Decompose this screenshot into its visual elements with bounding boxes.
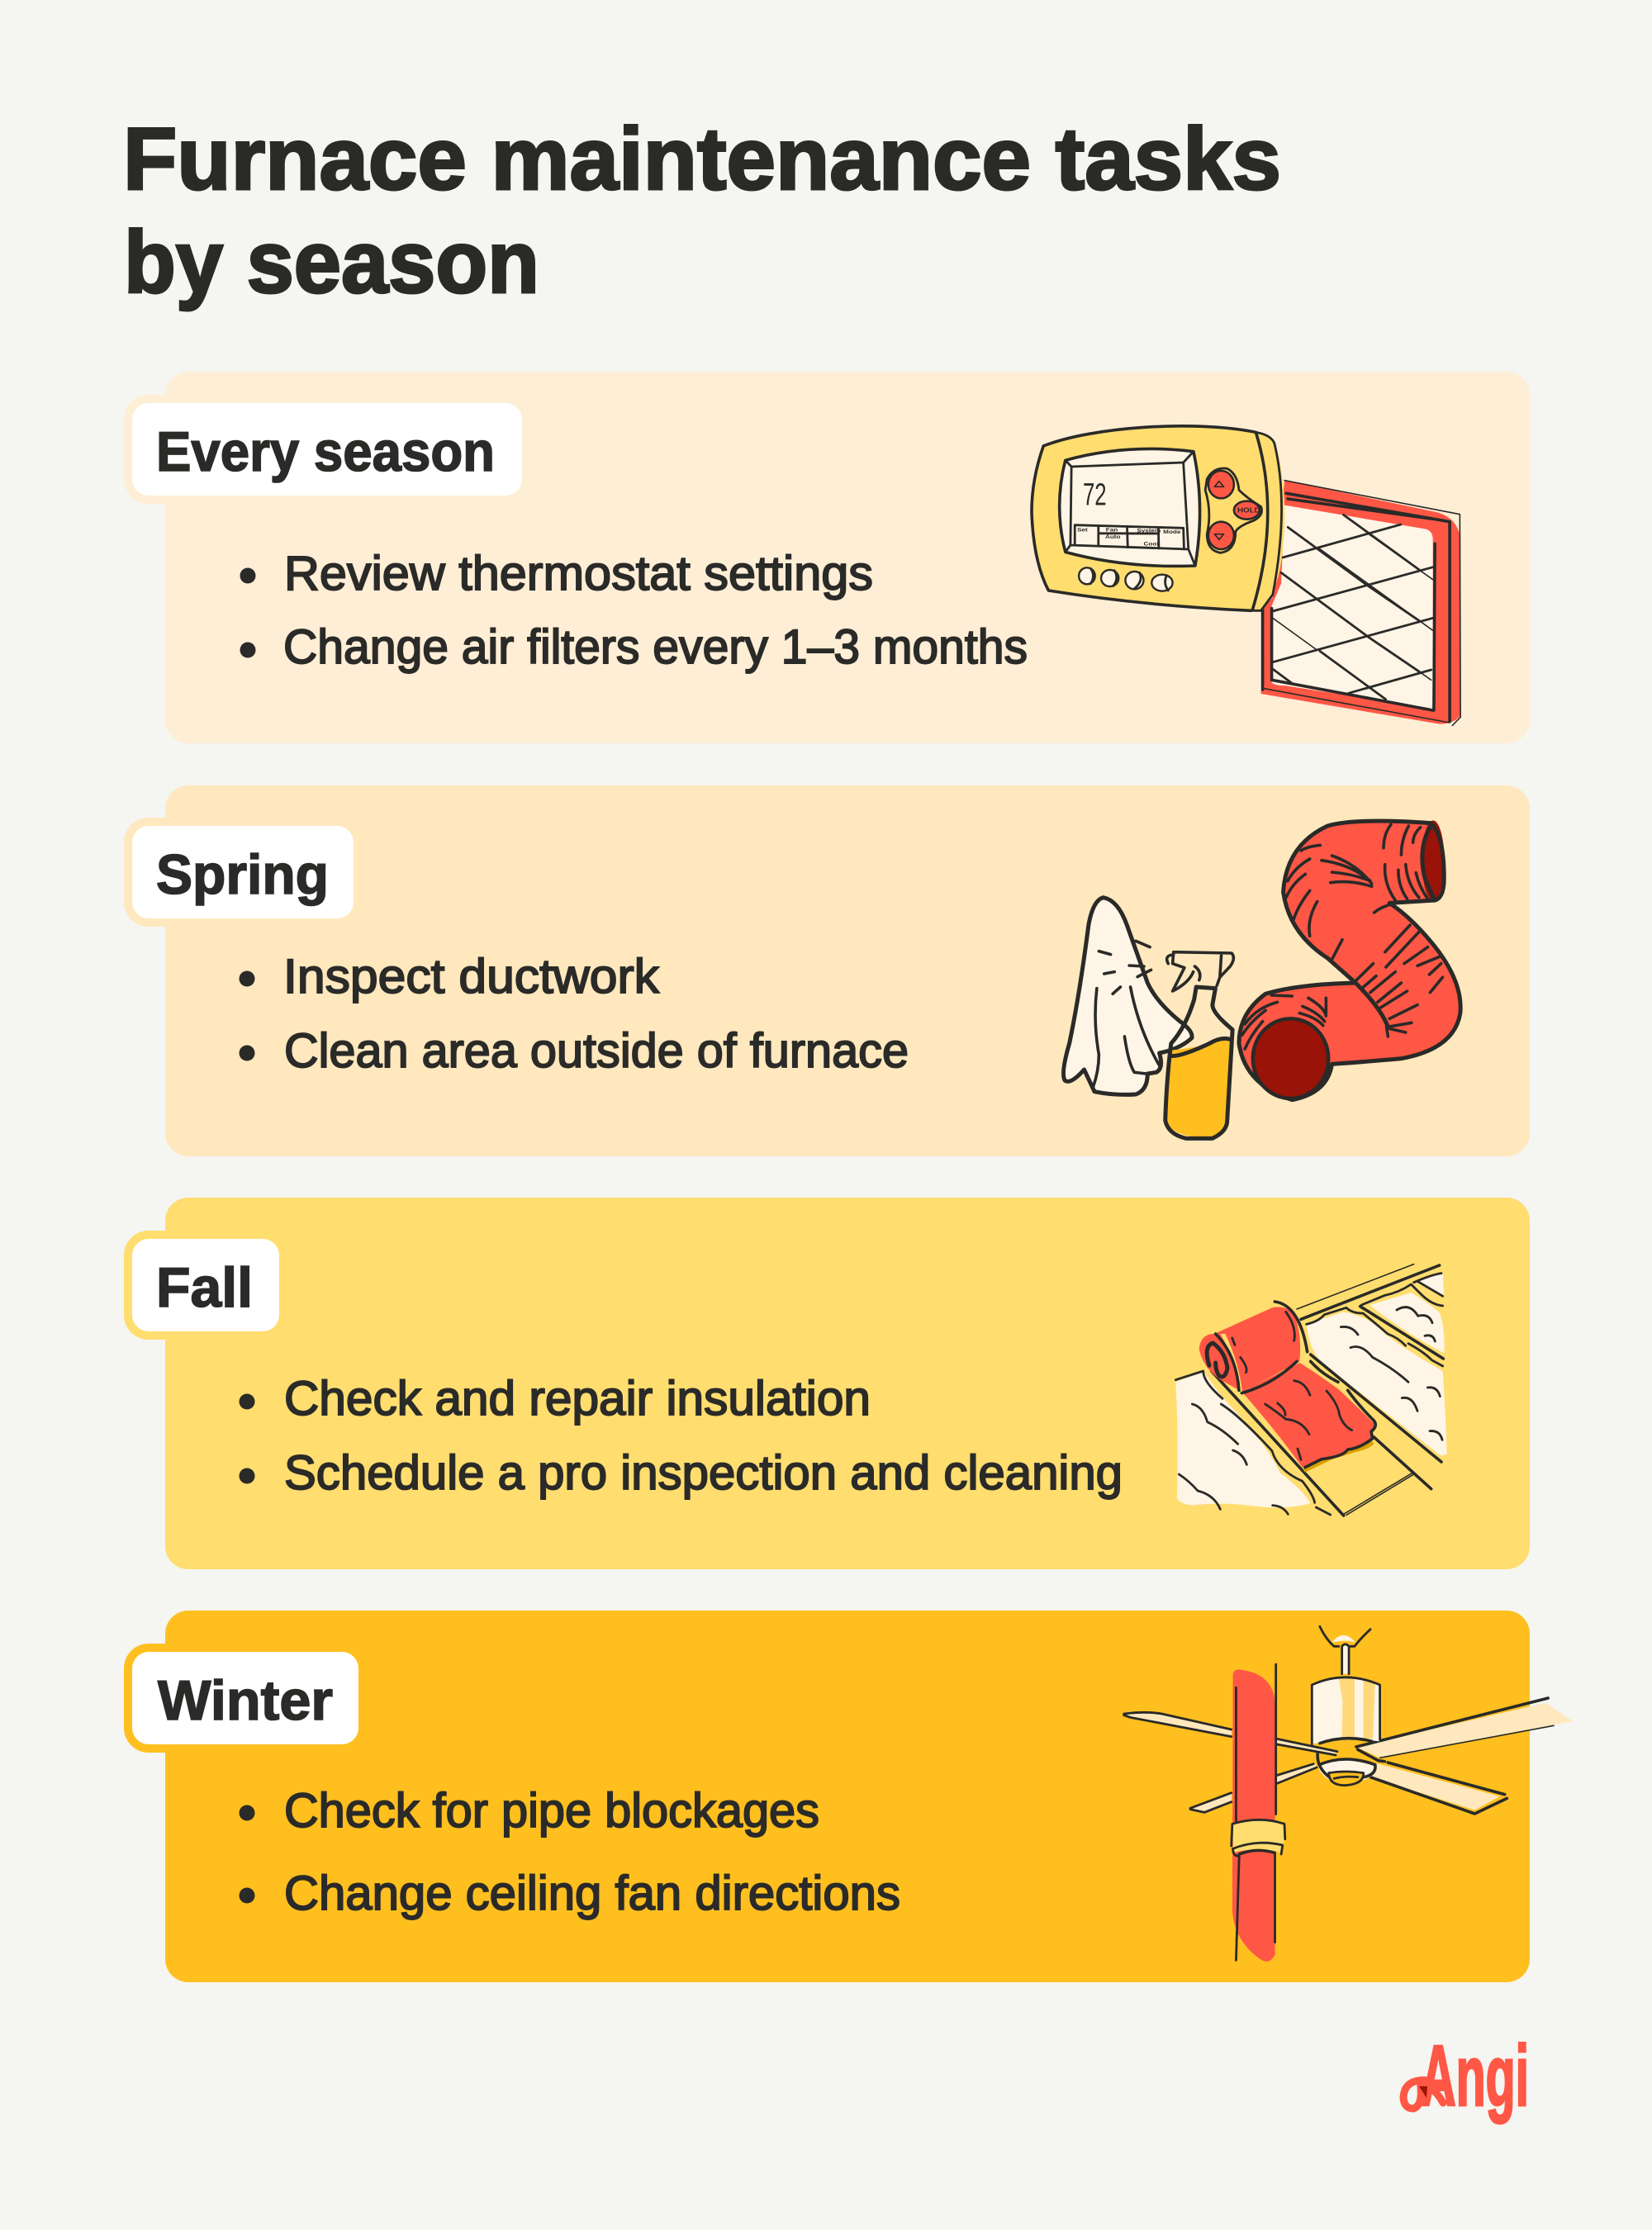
icon: thermostat and air filter (1031, 426, 1460, 725)
bullet list: Schedule a pro inspection and cleaning (284, 1446, 1123, 1500)
bullet list: Review thermostat settings (284, 547, 873, 600)
spray bottle (1165, 952, 1233, 1138)
thermostat screen labels: Fan (1106, 526, 1118, 533)
bullet list (240, 547, 1028, 674)
bullet list: Clean area outside of furnace (284, 1024, 909, 1078)
bullet list (240, 1784, 900, 1920)
icon: attic insulation roll (1175, 1264, 1447, 1516)
heading tab: spring: Spring (156, 843, 329, 906)
bullet list: Check for pipe blockages (284, 1784, 819, 1838)
panel: spring (124, 785, 1530, 1156)
title (123, 109, 1281, 311)
icon: thermostat and air filter: HOLD (1237, 507, 1260, 514)
panel background (165, 372, 1530, 743)
panel background (165, 785, 1530, 1156)
title: Furnace maintenance tasks (123, 109, 1281, 208)
thermostat screen labels: Mode (1163, 529, 1180, 535)
bullet list: Inspect ductwork (283, 950, 660, 1004)
heading tab: spring (124, 818, 362, 927)
panel: fall (124, 1198, 1530, 1569)
logo: Angi (1403, 2028, 1529, 2124)
heading tab: fall (124, 1231, 287, 1340)
bullet list: Change air filters every 1–3 months (283, 620, 1028, 674)
bullet list (240, 950, 909, 1078)
logo: Angi: Angi (1421, 2028, 1529, 2124)
heading tab: fall: Fall (156, 1256, 253, 1319)
thermostat screen labels: Cool (1143, 540, 1159, 547)
panel background (165, 1198, 1530, 1569)
thermostat screen labels (1077, 526, 1180, 547)
thermostat screen labels: Auto (1105, 534, 1121, 540)
heading tab: every season (124, 395, 530, 504)
icon: cloth, spray bottle and flexible duct (1063, 820, 1460, 1138)
flexible duct (1239, 820, 1460, 1100)
heading tab: winter: Winter (158, 1669, 333, 1732)
bullet list: Check and repair insulation (284, 1372, 871, 1426)
panel background (165, 1611, 1530, 1982)
heading tab: every season: Every season (156, 420, 495, 483)
heading tab: winter (124, 1644, 367, 1753)
thermostat screen labels: System (1137, 527, 1161, 534)
panel: winter (124, 1611, 1573, 1982)
cloth (1063, 898, 1192, 1094)
panel: every season (124, 372, 1530, 743)
bullet list (240, 1372, 1123, 1500)
icon: thermostat and air filter: 72 (1083, 477, 1107, 513)
icon: ceiling fan and pipe (1124, 1626, 1573, 1962)
title: by season (124, 212, 539, 311)
thermostat screen labels: Set (1077, 526, 1088, 533)
bullet list: Change ceiling fan directions (284, 1867, 900, 1920)
